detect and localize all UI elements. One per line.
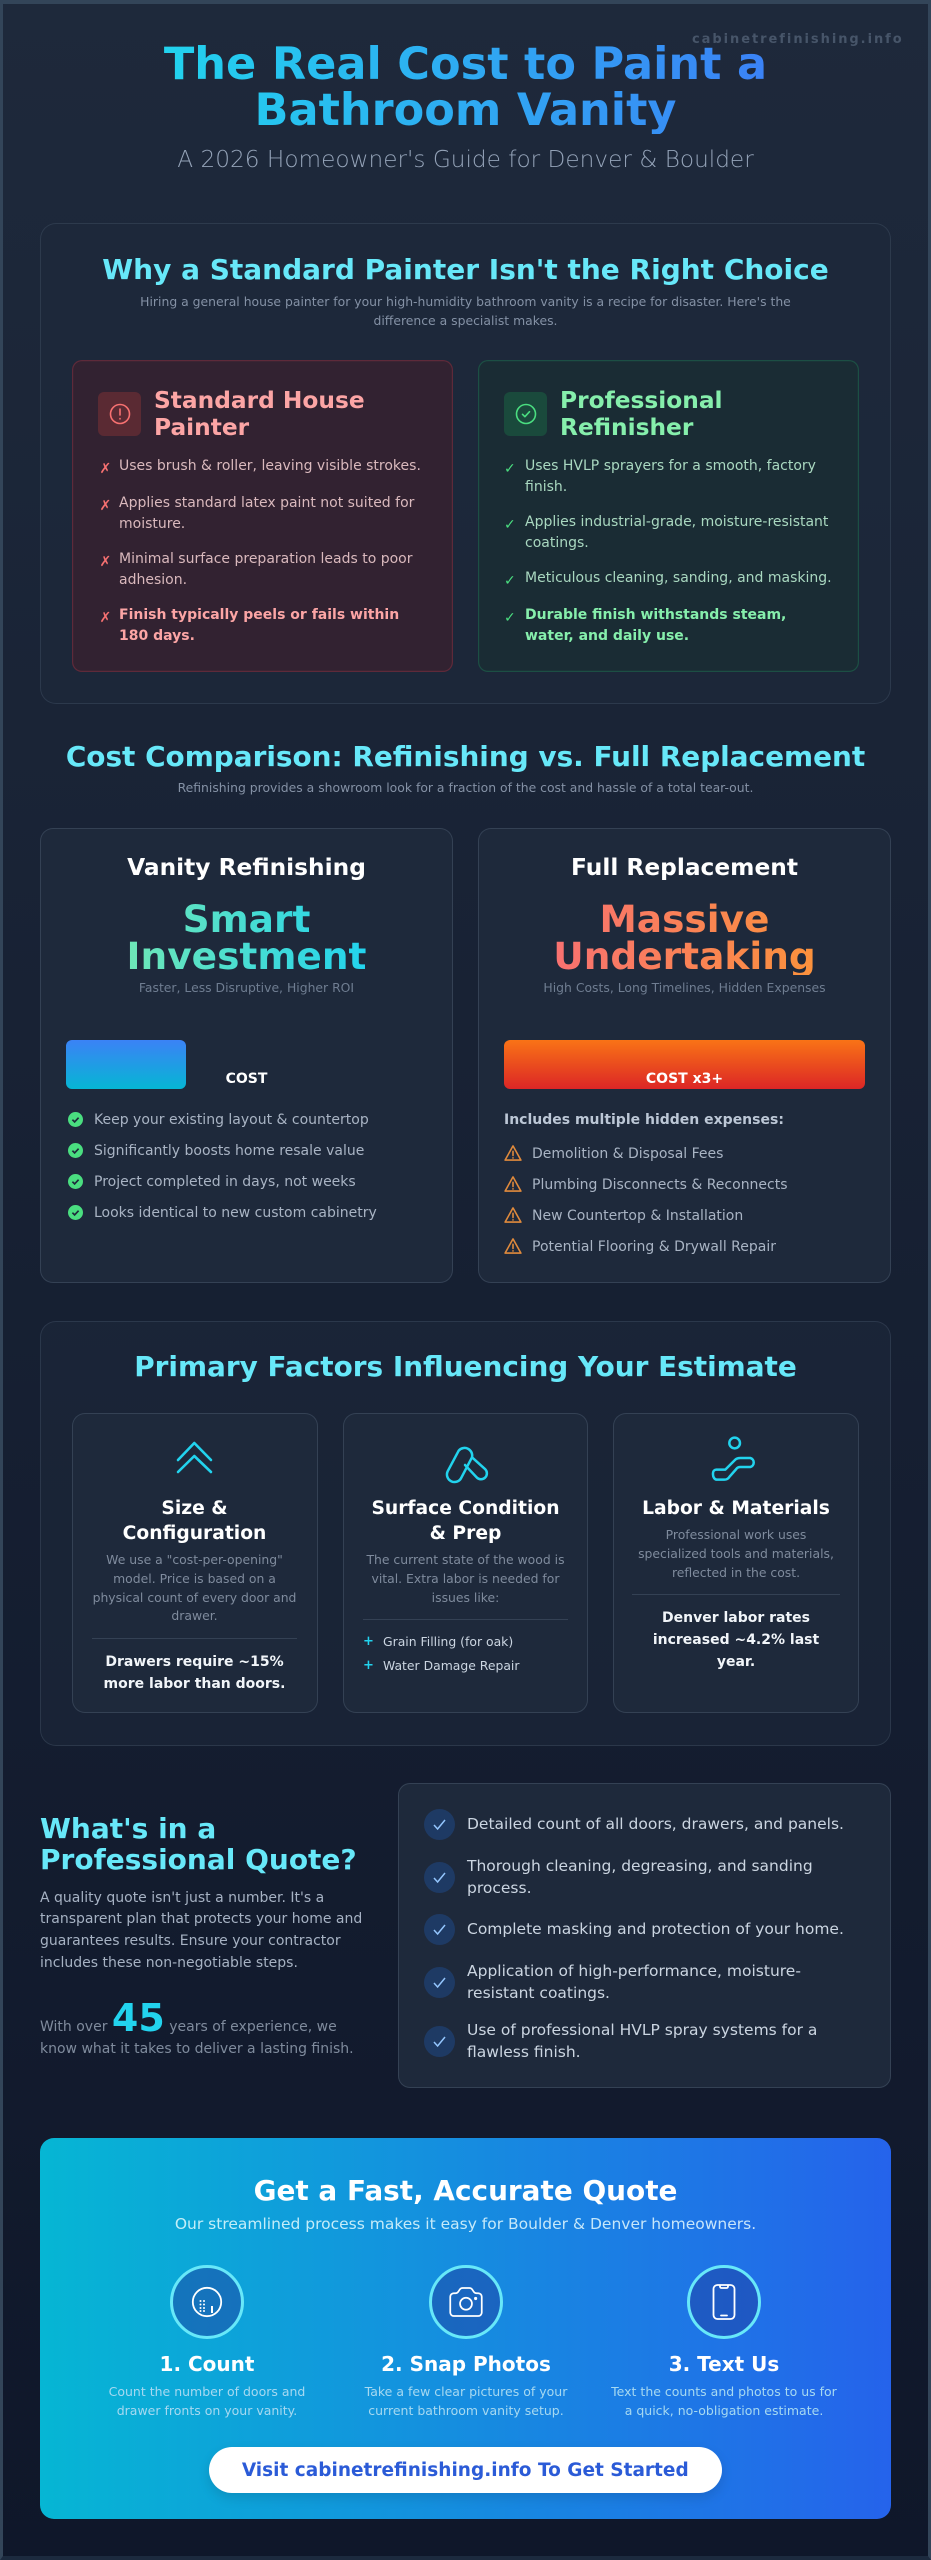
tagline: Faster, Less Disruptive, Higher ROI — [139, 980, 354, 995]
list: painter drawbacks: Finish typically peels or fails within — [119, 606, 399, 622]
factor description: The current state of the wood is — [366, 1552, 565, 1567]
factor heading: Surface Condition — [371, 1498, 560, 1519]
intro text: difference a specialist makes. — [373, 313, 558, 328]
list: refinisher benefits: finish. — [525, 479, 567, 495]
list: refinishing benefits: Project completed in days, not weeks — [94, 1174, 356, 1190]
section: what's in a quote — [40, 1812, 362, 2057]
step text: Text the counts and photos to us for — [611, 2384, 837, 2399]
title — [164, 38, 767, 134]
heading: professional refinisher: Professional — [560, 387, 723, 414]
factor description — [638, 1527, 834, 1580]
heading: standard house painter: Painter — [154, 414, 249, 441]
list: prep extras: Grain Filling (for oak) — [383, 1634, 513, 1649]
button: visit site — [209, 2447, 722, 2493]
factor description: issues like: — [432, 1590, 499, 1605]
heading: standard house painter: Standard House — [154, 387, 365, 414]
cost label: COST — [226, 1070, 267, 1086]
factor description: model. Price is based on a — [113, 1571, 276, 1586]
quote paragraph: A quality quote isn't just a number. It's a — [40, 1890, 324, 1906]
step text: current bathroom vanity setup. — [368, 2403, 564, 2418]
factor description: vital. Extra labor is needed for — [372, 1571, 559, 1586]
list: painter drawbacks: ✗ — [100, 554, 111, 570]
list: refinishing benefits: Significantly boosts home resale value — [94, 1142, 364, 1158]
factor heading: Configuration — [123, 1523, 266, 1544]
icon: phone — [687, 2265, 761, 2339]
icon: alert — [98, 392, 141, 436]
card: full replacement — [478, 828, 891, 1283]
step: count — [109, 2265, 305, 2418]
quote paragraph: guarantees results. Ensure your contractor — [40, 1933, 341, 1949]
step text: Count the number of doors and — [109, 2384, 305, 2399]
tagline: High Costs, Long Timelines, Hidden Expenses — [543, 980, 826, 995]
factor description: Professional work uses — [666, 1527, 806, 1542]
list: refinisher benefits: water, and daily use. — [525, 628, 689, 644]
step text — [109, 2384, 305, 2418]
list: refinisher benefits: ✓ — [504, 610, 516, 626]
check badge — [424, 1966, 454, 1998]
stat: 45 years: know what it takes to deliver a lasting finish. — [40, 2041, 354, 2057]
step text — [611, 2384, 837, 2418]
icon: surface condition — [446, 1446, 488, 1484]
factor description: drawer. — [171, 1608, 218, 1623]
panel: why a standard painter — [40, 223, 891, 704]
list: refinisher benefits: Uses HVLP sprayers for a smooth, factory — [525, 458, 816, 474]
checklist item — [467, 2021, 817, 2061]
list: refinishing benefits — [68, 1112, 377, 1220]
list: painter drawbacks: 180 days. — [119, 628, 195, 644]
list: painter drawbacks: Uses brush & roller, leaving visible strokes. — [119, 458, 421, 474]
quote paragraph: includes these non-negotiable steps. — [40, 1955, 298, 1971]
stat: 45 years: With over 45 years of experience, we — [40, 1996, 337, 2040]
button: visit site: Visit cabinetrefinishing.info To Get Started — [242, 2460, 689, 2481]
card title: Vanity Refinishing — [127, 854, 366, 880]
list: refinishing benefits: Keep your existing layout & countertop — [94, 1112, 369, 1128]
cta subtitle: Our streamlined process makes it easy for Boulder & Denver homeowners. — [175, 2215, 756, 2233]
list: hidden expenses — [504, 1145, 788, 1254]
step heading: 2. Snap Photos — [381, 2352, 551, 2376]
heading: cost comparison: Cost Comparison: Refinishing vs. Full Replacement — [66, 740, 865, 773]
check badge — [424, 1862, 454, 1892]
factor highlight: year. — [717, 1654, 755, 1670]
list: painter drawbacks: adhesion. — [119, 572, 187, 588]
heading: professional quote: What's in a — [40, 1812, 216, 1844]
list: painter drawbacks: Minimal surface preparation leads to poor — [119, 550, 412, 566]
checklist item — [467, 1962, 801, 2002]
factor highlight — [104, 1654, 285, 1692]
step heading: 3. Text Us — [669, 2352, 779, 2376]
factor description — [366, 1552, 565, 1605]
factor description: specialized tools and materials, — [638, 1546, 834, 1561]
step heading: 1. Count — [160, 2352, 254, 2376]
headline: massive undertaking — [553, 896, 816, 978]
step text: a quick, no-obligation estimate. — [625, 2403, 823, 2418]
list: refinisher benefits: ✓ — [504, 517, 516, 533]
title: The Real Cost to Paint a — [164, 38, 767, 90]
check badge — [424, 2026, 454, 2056]
heading: standard house painter — [154, 387, 365, 441]
factor heading: & Prep — [430, 1523, 501, 1544]
factor heading — [371, 1498, 560, 1544]
factor heading: Labor & Materials — [642, 1498, 830, 1519]
icon: camera — [429, 2265, 503, 2339]
icon: labor tools — [712, 1436, 755, 1481]
list: hidden expenses: Demolition & Disposal Fees — [532, 1146, 723, 1162]
icon: double chevron — [176, 1442, 212, 1474]
panel: primary factors — [40, 1321, 891, 1746]
subtitle: A 2026 Homeowner's Guide for Denver & Boulder — [177, 146, 754, 172]
headline: smart investment — [127, 896, 366, 978]
card: labor and materials — [613, 1413, 859, 1713]
icon: count — [170, 2265, 244, 2339]
heading: why: Why a Standard Painter Isn't the Right Choice — [102, 253, 829, 286]
cost bar: small — [66, 1040, 186, 1089]
factor highlight: more labor than doors. — [104, 1676, 285, 1692]
factor highlight — [653, 1610, 819, 1670]
checklist item: Detailed count of all doors, drawers, and panels. — [467, 1815, 844, 1833]
checklist item: flawless finish. — [467, 2043, 581, 2061]
hidden expenses label: Includes multiple hidden expenses: — [504, 1112, 784, 1128]
heading: primary factors: Primary Factors Influencing Your Estimate — [134, 1350, 797, 1383]
checklist item: Use of professional HVLP spray systems for a — [467, 2021, 817, 2039]
stat: 45 years — [40, 1996, 354, 2057]
card: surface condition — [343, 1413, 588, 1713]
card: standard house painter — [72, 360, 453, 672]
list: prep extras: + — [363, 1658, 374, 1673]
factor highlight: Denver labor rates — [662, 1610, 810, 1626]
cost label: COST x3+ — [646, 1070, 723, 1086]
list: refinisher benefits: coatings. — [525, 535, 589, 551]
checklist item: Complete masking and protection of your home. — [467, 1920, 844, 1938]
factor description: physical count of every door and — [93, 1590, 296, 1605]
heading: professional refinisher — [560, 387, 723, 441]
intro text: Hiring a general house painter for your high-humidity bathroom vanity is a recipe for disaster. Here's the — [140, 294, 791, 309]
factor highlight: increased ~4.2% last — [653, 1632, 819, 1648]
checklist item: process. — [467, 1879, 532, 1897]
heading: professional quote: Professional Quote? — [40, 1842, 357, 1876]
headline: massive undertaking: Undertaking — [553, 934, 816, 978]
step: snap photos — [364, 2265, 568, 2418]
factor description — [93, 1552, 296, 1623]
list: prep extras — [363, 1634, 520, 1673]
step text — [364, 2384, 568, 2418]
list: painter drawbacks: ✗ — [100, 610, 111, 626]
list: prep extras: + — [363, 1634, 374, 1649]
list: refinisher benefits — [504, 458, 832, 644]
quote paragraph — [40, 1890, 362, 1971]
quote paragraph: transparent plan that protects your home and — [40, 1911, 362, 1927]
list: hidden expenses: Potential Flooring & Drywall Repair — [532, 1238, 776, 1254]
card: professional refinisher — [478, 360, 859, 672]
card title: Full Replacement — [571, 854, 798, 880]
check badge — [424, 1808, 454, 1840]
watermark: cabinetrefinishing.info — [692, 32, 904, 46]
list: painter drawbacks: ✗ — [100, 498, 111, 514]
factor highlight: Drawers require ~15% — [105, 1654, 284, 1670]
step text: Take a few clear pictures of your — [365, 2384, 567, 2399]
check badge — [424, 1914, 454, 1944]
factor description: We use a "cost-per-opening" — [106, 1552, 283, 1567]
list: refinisher benefits: ✓ — [504, 573, 516, 589]
list: hidden expenses: New Countertop & Installation — [532, 1208, 743, 1224]
cost bar: large — [504, 1040, 865, 1089]
heading: fast quote: Get a Fast, Accurate Quote — [254, 2174, 677, 2207]
list: painter drawbacks — [100, 458, 421, 644]
list: painter drawbacks: Applies standard latex paint not suited for — [119, 494, 414, 510]
intro text — [140, 294, 791, 328]
headline: massive undertaking: Massive — [599, 896, 769, 940]
list: prep extras: Water Damage Repair — [383, 1658, 519, 1673]
heading: professional refinisher: Refinisher — [560, 414, 693, 441]
icon: check — [504, 392, 547, 436]
list: refinisher benefits: Applies industrial-grade, moisture-resistant — [525, 514, 828, 530]
headline: smart investment: Smart — [183, 896, 310, 940]
card: size and configuration — [72, 1413, 318, 1713]
checklist item: Application of high-performance, moisture- — [467, 1962, 801, 1980]
checklist item: Thorough cleaning, degreasing, and sanding — [467, 1857, 813, 1875]
list: hidden expenses: Plumbing Disconnects & Reconnects — [532, 1176, 788, 1192]
list: refinisher benefits: Durable finish withstands steam, — [525, 606, 786, 622]
list: refinisher benefits: Meticulous cleaning, sanding, and masking. — [525, 570, 832, 586]
factor heading — [123, 1498, 266, 1544]
step text: drawer fronts on your vanity. — [117, 2403, 297, 2418]
factor description: reflected in the cost. — [672, 1565, 800, 1580]
headline: smart investment: Investment — [127, 934, 366, 978]
checklist item: resistant coatings. — [467, 1984, 610, 2002]
panel: call to action — [40, 2138, 891, 2519]
cost comparison intro: Refinishing provides a showroom look for a fraction of the cost and hassle of a total tear-out. — [178, 780, 753, 795]
list: refinisher benefits: ✓ — [504, 461, 516, 477]
card: vanity refinishing — [40, 828, 453, 1283]
factor heading: Size & — [161, 1498, 228, 1519]
heading: professional quote — [40, 1812, 357, 1876]
step: text us — [611, 2265, 837, 2418]
list: painter drawbacks: ✗ — [100, 461, 111, 477]
list: painter drawbacks: moisture. — [119, 516, 185, 532]
list: refinishing benefits: Looks identical to new custom cabinetry — [94, 1204, 377, 1220]
checklist item — [466, 1857, 813, 1897]
panel: quote checklist — [398, 1783, 891, 2088]
